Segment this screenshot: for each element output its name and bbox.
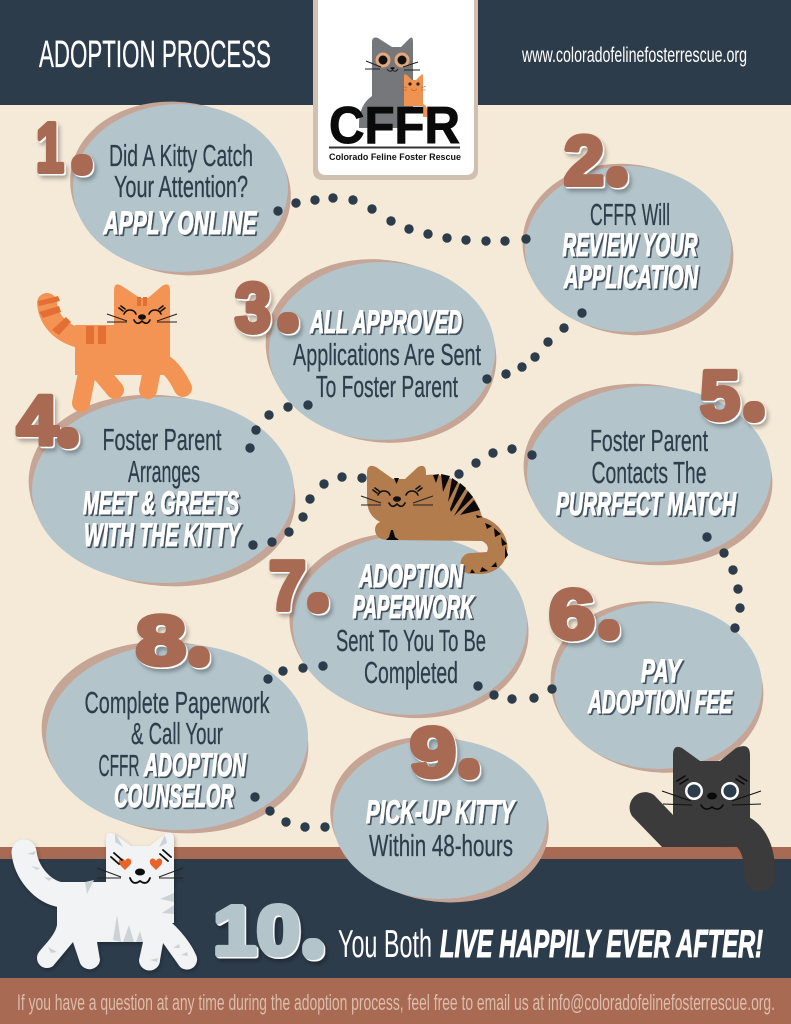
step 8 text: Complete Paperwork — [84, 685, 270, 720]
number 5: 5 — [700, 356, 740, 434]
step 7 text: ADOPTION — [358, 558, 464, 594]
number 2: 2 — [564, 122, 604, 200]
step 4 text: Arranges — [128, 454, 200, 489]
bubble 3 — [251, 241, 511, 461]
number 9: 9 — [410, 714, 456, 792]
bubble 4 — [16, 378, 308, 603]
bubble 1 — [56, 85, 305, 292]
step 1 text: Your Attention? — [114, 169, 248, 204]
number 5 — [700, 356, 757, 434]
step 4 text — [83, 422, 242, 553]
step 2 text: REVIEW YOUR — [562, 227, 698, 263]
step 4 text: Foster Parent — [102, 422, 222, 457]
number 3: 3 — [235, 268, 271, 346]
bubble 9 — [317, 720, 562, 919]
number 8: 8 — [136, 602, 186, 680]
dotted connectors — [245, 193, 745, 832]
number 6: 6 — [549, 576, 595, 654]
number 1: . — [79, 149, 85, 171]
step 9 text: Within 48-hours — [369, 828, 513, 863]
step 4 text: MEET & GREETS — [83, 485, 239, 521]
bubble 7 — [277, 518, 541, 733]
step 3 text: Applications Are Sent — [293, 337, 481, 372]
step 6 text — [587, 653, 733, 720]
logo card — [313, 0, 478, 180]
number 10: 10 — [213, 892, 300, 970]
number 7: . — [315, 587, 321, 609]
step 2 text — [562, 197, 699, 295]
step 9 text: PICK-UP KITTY — [366, 794, 516, 830]
footer bands — [0, 847, 791, 1024]
tabby cat — [361, 466, 508, 574]
number 6 — [549, 576, 612, 654]
title: ADOPTION PROCESS — [39, 34, 271, 76]
bubble 6 — [537, 585, 777, 789]
number 9 — [410, 714, 472, 792]
step 6 text: PAY — [641, 653, 683, 689]
step 5 text — [556, 423, 737, 522]
bubble 5 — [512, 368, 784, 581]
number 4: . — [65, 422, 71, 444]
number 6: . — [606, 614, 612, 636]
step 5 text: Foster Parent — [590, 423, 708, 458]
orange cat — [38, 284, 183, 403]
step 3 text: To Foster Parent — [316, 369, 458, 404]
logo tagline: Colorado Feline Foster Rescue — [329, 152, 461, 163]
number 2 — [564, 122, 620, 200]
number 3: . — [285, 307, 291, 329]
number 5: . — [751, 396, 757, 418]
step 9 text — [366, 794, 516, 863]
black cat — [630, 746, 761, 876]
step 7 text: Sent To You To Be — [336, 623, 486, 658]
number 8: . — [196, 641, 202, 663]
step 7 text — [336, 558, 486, 690]
white cat — [24, 833, 197, 970]
step 3 text: ALL APPROVED — [309, 304, 462, 340]
step 2 text: APPLICATION — [563, 259, 699, 295]
bubble 8 — [29, 625, 321, 850]
step 1 text: Did A Kitty Catch — [109, 138, 253, 173]
step 10 text: You Both — [338, 923, 432, 966]
number 8 — [136, 602, 202, 680]
number 1: 1 — [36, 108, 64, 186]
step 8 text — [84, 685, 270, 814]
step 1 text — [103, 138, 258, 241]
step 4 text: WITH THE KITTY — [84, 517, 242, 553]
step 8 text: CFFR — [98, 748, 140, 783]
step 7 text: PAPERWORK — [352, 589, 475, 625]
step 8 text: ADOPTION — [143, 747, 247, 783]
numbers — [17, 108, 757, 970]
step 8 text: COUNSELOR — [114, 778, 234, 814]
number 9: . — [466, 753, 472, 775]
step 8 text: & Call Your — [131, 716, 223, 751]
number 7: 7 — [269, 546, 306, 624]
step 1 text: APPLY ONLINE — [103, 205, 258, 241]
bubble 2 — [509, 147, 747, 352]
number 10: . — [310, 933, 316, 955]
number 3 — [235, 268, 291, 346]
logo orange kitten — [402, 74, 428, 117]
step 3 text — [293, 304, 481, 404]
number 2: . — [614, 161, 620, 183]
header band — [0, 0, 791, 105]
step 2 text: CFFR Will — [590, 197, 670, 232]
number 4: 4 — [17, 382, 58, 460]
step 7 text: Completed — [364, 655, 458, 690]
logo wordmark: CFFR — [329, 97, 460, 155]
step 5 text: Contacts The — [592, 455, 706, 490]
logo gray cat — [359, 38, 420, 128]
